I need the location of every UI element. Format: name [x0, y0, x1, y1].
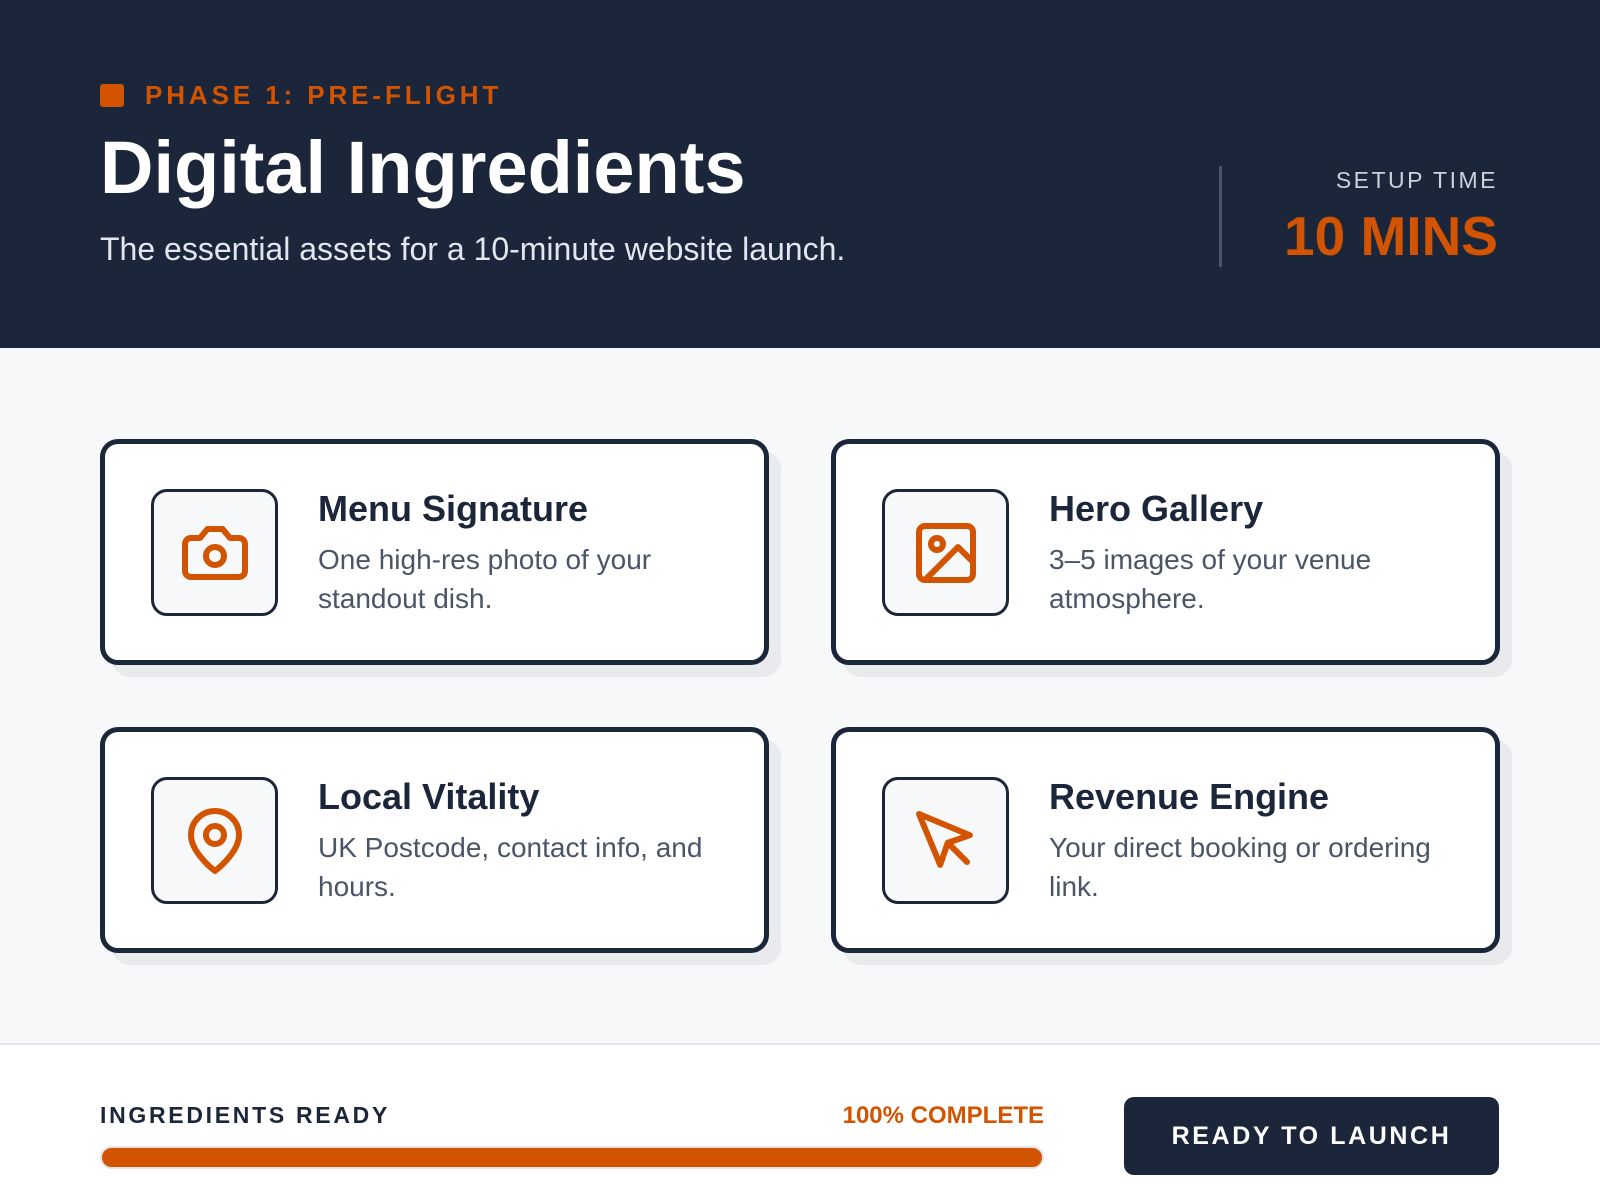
icon: image [882, 489, 1009, 616]
setup time stat [1284, 167, 1498, 267]
subtitle: The essential assets for a 10-minute website launch. [100, 231, 845, 267]
card: Menu Signature [100, 439, 769, 665]
icon: cursor [882, 777, 1009, 904]
card: Local Vitality [100, 727, 769, 953]
card: Revenue Engine [831, 727, 1500, 953]
icon: map pin [151, 777, 278, 904]
card: Revenue Engine: Revenue Engine [1049, 776, 1329, 817]
setup time stat: SETUP TIME [1336, 167, 1498, 193]
header band [0, 0, 1600, 348]
progress label: INGREDIENTS READY [100, 1102, 390, 1128]
card: Hero Gallery: 3–5 images of your venue atmosphere. [1049, 544, 1371, 614]
card: Local Vitality: Local Vitality [318, 776, 539, 817]
button: ready to launch [1124, 1097, 1499, 1175]
progress bar [100, 1146, 1044, 1169]
card: Local Vitality: UK Postcode, contact info, and hours. [318, 832, 702, 902]
cards area [0, 348, 1600, 1045]
title: Digital Ingredients [100, 126, 746, 209]
card: Hero Gallery: Hero Gallery [1049, 488, 1263, 529]
setup time stat: 10 MINS [1284, 205, 1498, 267]
phase label: PHASE 1: PRE-FLIGHT [145, 80, 502, 110]
icon: camera [151, 489, 278, 616]
card: Menu Signature: One high-res photo of your standout dish. [318, 544, 651, 614]
footer progress [100, 1102, 1044, 1169]
percentage: 100% COMPLETE [843, 1102, 1044, 1129]
button: ready to launch: READY TO LAUNCH [1172, 1122, 1451, 1150]
card: Revenue Engine: Your direct booking or ordering link. [1049, 832, 1431, 902]
card: Menu Signature: Menu Signature [318, 488, 588, 529]
card: Hero Gallery [831, 439, 1500, 665]
divider [1219, 166, 1222, 267]
